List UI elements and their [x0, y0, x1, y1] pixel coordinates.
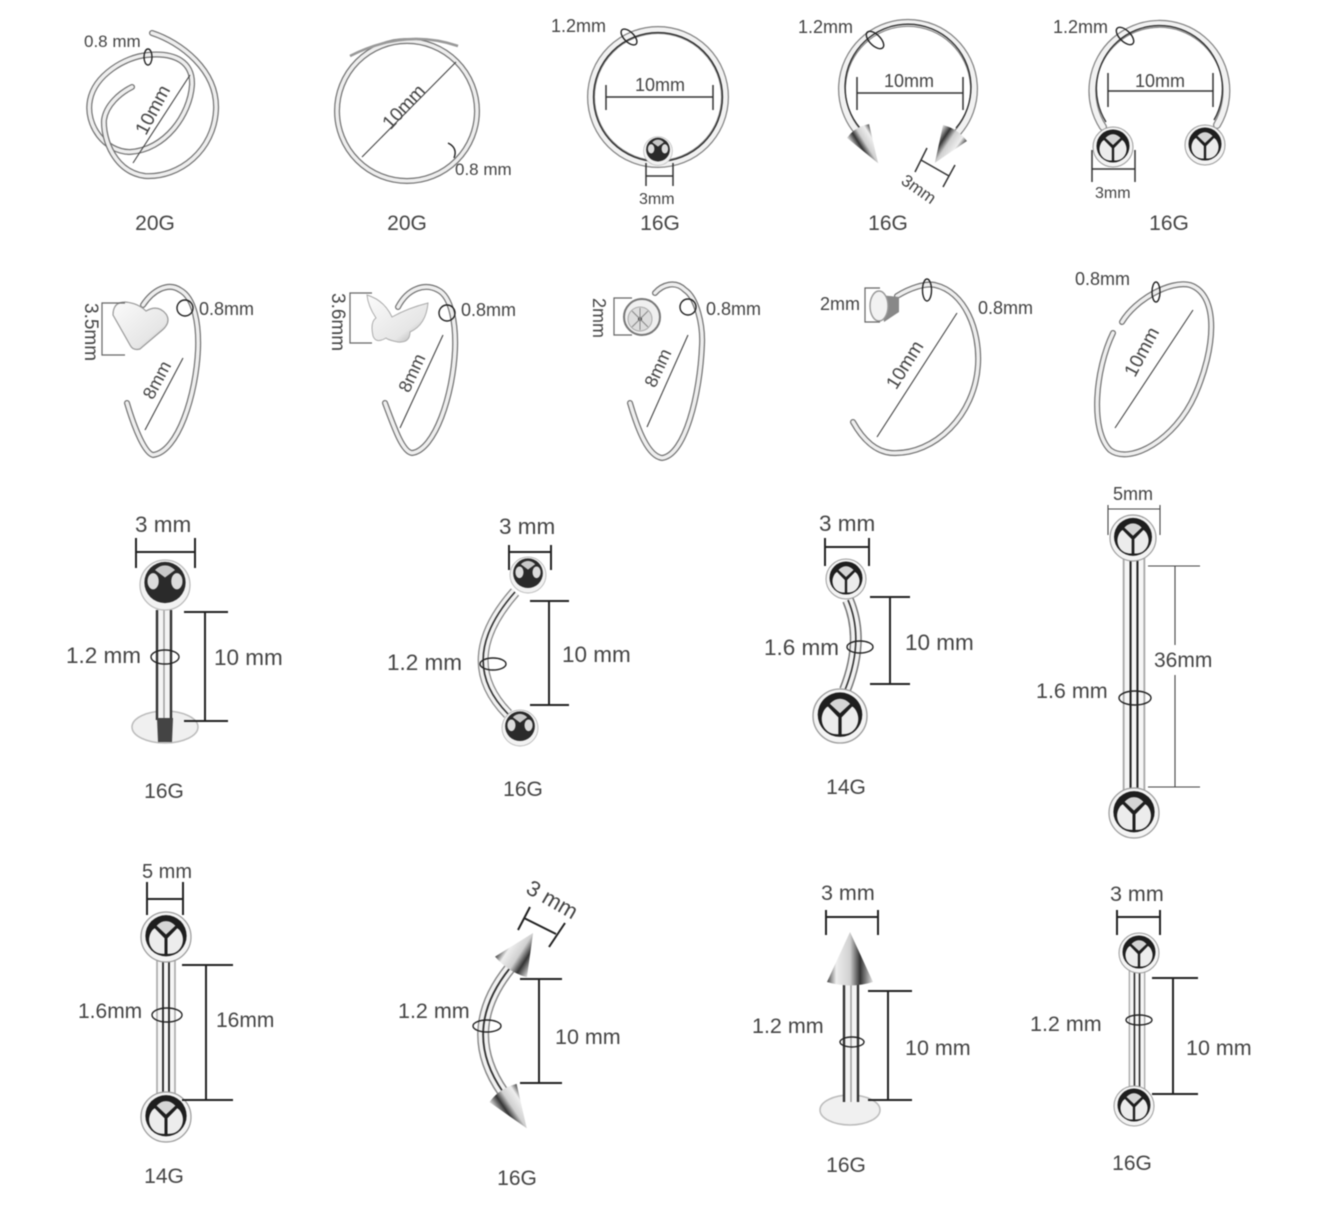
item: curved barbell 16G: 16G — [503, 778, 543, 801]
item: curved spike barbell 16G — [398, 875, 621, 1190]
item: captive bead ring 16G: 3mm — [639, 191, 675, 208]
item: flat disc nose ring: 0.8mm — [978, 298, 1033, 318]
item: plain oval nose ring: 0.8mm — [1075, 269, 1130, 289]
item: tongue barbell 14G: 1.6mm — [78, 1000, 142, 1023]
item: double spiral nose ring 20G: 10mm — [132, 82, 175, 138]
item: butterfly nose ring: 0.8mm — [461, 300, 516, 320]
item: curved spike barbell 16G: 10 mm — [555, 1025, 621, 1049]
item: heart nose ring: 8mm — [139, 358, 175, 402]
item: butterfly nose ring — [327, 287, 516, 453]
item: gem nose ring — [589, 284, 761, 458]
item: industrial barbell — [1036, 484, 1212, 838]
item: seam ring 20G: 10mm — [379, 81, 430, 134]
item: ball horseshoe 16G: 3mm — [1095, 185, 1131, 202]
item: captive bead ring 16G: 1.2mm — [551, 16, 606, 36]
item: industrial barbell: 5mm — [1113, 484, 1153, 504]
item: spike horseshoe 16G: 1.2mm — [798, 17, 853, 37]
item: spike labret 16G: 3 mm — [821, 881, 875, 905]
item: short barbell 16G: 16G — [1112, 1152, 1152, 1175]
item: plain oval nose ring: 10mm — [1121, 324, 1164, 380]
item: labret stud 16G: 10 mm — [214, 645, 283, 670]
item: seam ring 20G: 0.8 mm — [455, 160, 512, 179]
item: curved spike barbell 16G: 16G — [497, 1167, 537, 1190]
item: spike horseshoe 16G — [798, 17, 974, 235]
item: heart nose ring — [80, 287, 254, 455]
item: spike labret 16G — [752, 881, 971, 1177]
item: labret stud 16G: 16G — [144, 780, 184, 803]
item: ball horseshoe 16G: 16G — [1149, 212, 1189, 235]
item: heart nose ring: 3.5mm — [80, 303, 101, 361]
item: butterfly nose ring: 8mm — [394, 351, 430, 395]
item: butterfly nose ring: 3.6mm — [327, 293, 348, 351]
item: belly ring 14G: 10 mm — [905, 630, 974, 655]
item: heart nose ring: 0.8mm — [199, 299, 254, 319]
item: belly ring 14G — [764, 511, 974, 799]
item: double spiral nose ring 20G — [84, 32, 216, 235]
item: flat disc nose ring — [820, 279, 1033, 453]
item: belly ring 14G: 1.6 mm — [764, 635, 839, 660]
item: labret stud 16G: 1.2 mm — [66, 643, 141, 668]
item: short barbell 16G — [1030, 882, 1252, 1175]
item: captive bead ring 16G: 10mm — [635, 75, 685, 95]
item: short barbell 16G: 1.2 mm — [1030, 1012, 1102, 1036]
item: labret stud 16G — [66, 512, 283, 803]
item: curved spike barbell 16G: 3 mm — [522, 875, 582, 924]
item: tongue barbell 14G: 16mm — [216, 1009, 274, 1032]
item: curved barbell 16G: 1.2 mm — [387, 650, 462, 675]
item: flat disc nose ring: 2mm — [820, 294, 860, 314]
item: belly ring 14G: 14G — [826, 776, 866, 799]
item: gem nose ring: 8mm — [640, 346, 676, 390]
item: plain oval nose ring — [1075, 269, 1211, 454]
item: flat disc nose ring: 10mm — [883, 337, 928, 393]
item: seam ring 20G — [337, 39, 512, 235]
item: short barbell 16G: 10 mm — [1186, 1036, 1252, 1060]
item: short barbell 16G: 3 mm — [1110, 882, 1164, 906]
item: spike labret 16G: 16G — [826, 1154, 866, 1177]
item: spike horseshoe 16G: 16G — [868, 212, 908, 235]
item: industrial barbell: 36mm — [1154, 649, 1212, 672]
item: curved spike barbell 16G: 1.2 mm — [398, 999, 470, 1023]
item: gem nose ring: 0.8mm — [706, 299, 761, 319]
item: captive bead ring 16G: 16G — [640, 212, 680, 235]
item: belly ring 14G: 3 mm — [819, 511, 875, 536]
item: double spiral nose ring 20G: 20G — [135, 212, 175, 235]
item: ball horseshoe 16G — [1053, 17, 1226, 235]
item: double spiral nose ring 20G: 0.8 mm — [84, 32, 141, 51]
item: seam ring 20G: 20G — [387, 212, 427, 235]
item: tongue barbell 14G: 5 mm — [142, 861, 192, 883]
item: curved barbell 16G: 3 mm — [499, 514, 555, 539]
item: ball horseshoe 16G: 1.2mm — [1053, 17, 1108, 37]
item: curved barbell 16G — [387, 514, 631, 801]
item: captive bead ring 16G — [551, 16, 725, 235]
item: spike labret 16G: 10 mm — [905, 1036, 971, 1060]
item: tongue barbell 14G: 14G — [144, 1165, 184, 1188]
item: spike horseshoe 16G: 3mm — [898, 171, 940, 208]
item: curved barbell 16G: 10 mm — [562, 642, 631, 667]
item: spike labret 16G: 1.2 mm — [752, 1014, 824, 1038]
item: ball horseshoe 16G: 10mm — [1135, 71, 1185, 91]
item: spike horseshoe 16G: 10mm — [884, 71, 934, 91]
item: gem nose ring: 2mm — [589, 298, 609, 338]
item: tongue barbell 14G — [78, 861, 274, 1188]
item: labret stud 16G: 3 mm — [135, 512, 191, 537]
item: industrial barbell: 1.6 mm — [1036, 679, 1108, 703]
